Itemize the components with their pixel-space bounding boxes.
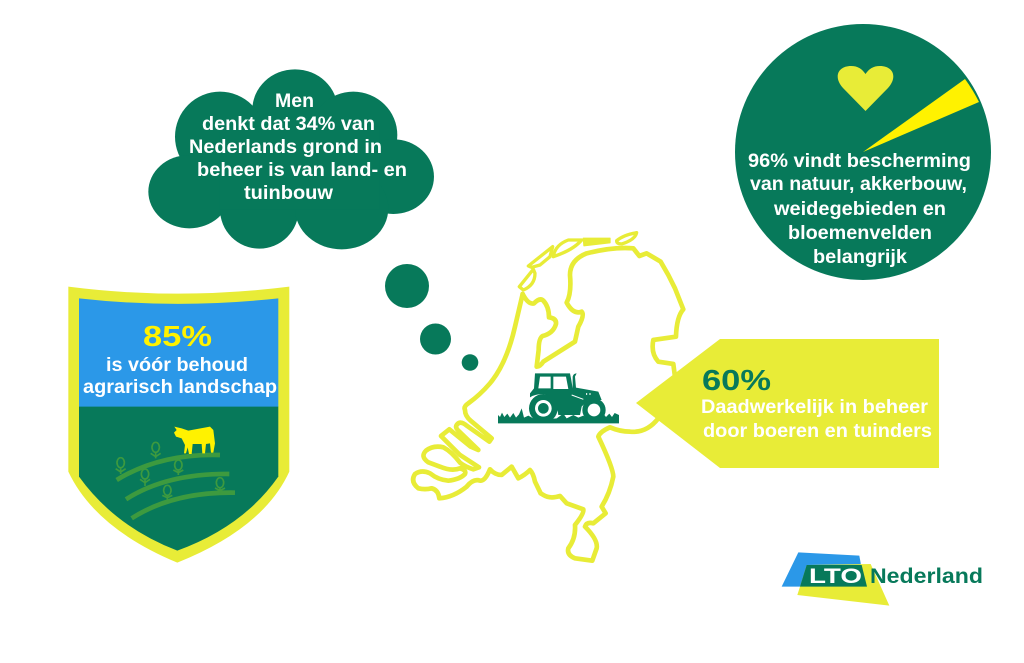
icon: heart: [838, 66, 893, 111]
logo shapes: [782, 552, 889, 606]
shield graphic: [68, 287, 289, 563]
landscape stripes: [117, 455, 235, 518]
logo: LTO Nederland: [782, 552, 983, 606]
icon: tractor on grass: [498, 373, 619, 423]
circle text: [748, 151, 971, 268]
icon: cow: [174, 427, 215, 454]
panel: arrow callout 60%: [636, 339, 939, 468]
panel: shield: agrarisch landschap: [83, 377, 277, 398]
circle text: bloemenvelden: [788, 223, 932, 244]
cloud text: tuinbouw: [244, 183, 333, 204]
circle text: belangrijk: [813, 247, 907, 268]
logo text Nederland: Nederland: [870, 565, 983, 588]
cloud text: Nederlands grond in: [189, 137, 382, 158]
panel: arrow callout 60%: Daadwerkelijk in beheer: [701, 397, 929, 418]
map of the Netherlands: [413, 233, 683, 561]
cloud text: beheer is van land- en: [197, 160, 407, 181]
flowers: [116, 442, 225, 500]
circle text: van natuur, akkerbouw,: [750, 174, 967, 195]
cloud text: [189, 91, 407, 204]
tractor body: [530, 373, 602, 415]
rear wheel: [529, 394, 558, 423]
shield text: 85%: [143, 321, 212, 353]
cloud text: Men: [275, 91, 314, 112]
arrow shape: [636, 339, 939, 468]
panel: thought cloud: [148, 69, 434, 249]
front wheel: [582, 398, 606, 422]
cloud text: denkt dat 34% van: [202, 114, 375, 135]
callout text: 60%: [702, 365, 771, 397]
panel: arrow callout 60%: door boeren en tuinders: [703, 421, 932, 442]
yellow wedge: [863, 79, 979, 152]
panel: shield: is vóór behoud: [106, 355, 248, 376]
circle: [735, 24, 991, 280]
cloud shape: [148, 69, 434, 249]
grass: [498, 408, 619, 423]
landscape illustration: [116, 427, 235, 518]
thought bubbles: [385, 264, 478, 371]
panel: shield: [68, 287, 289, 563]
circle text: weidegebieden en: [773, 199, 946, 220]
panel: circle 96%: [735, 24, 991, 280]
circle text: 96% vindt bescherming: [748, 151, 971, 172]
logo text LTO: LTO: [809, 565, 862, 588]
